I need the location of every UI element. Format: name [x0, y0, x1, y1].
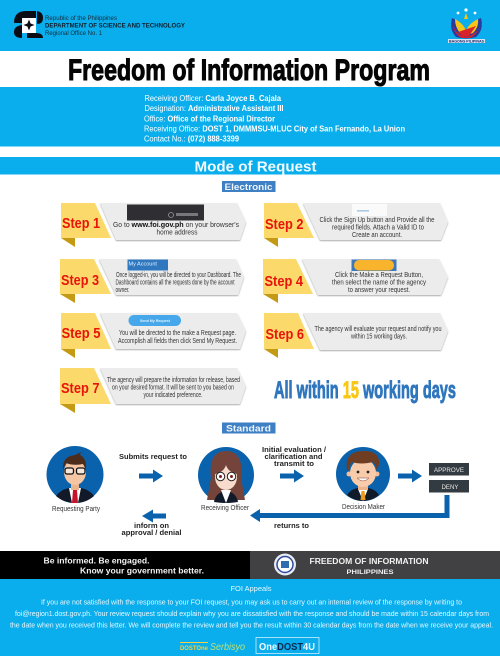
step 5: Accomplish all fields then click Send My Request.	[118, 338, 237, 345]
button: approve	[429, 463, 469, 476]
label: initial evaluation: clarification and	[264, 452, 322, 461]
icon: decision maker	[336, 447, 390, 501]
button: deny: DENY	[442, 484, 459, 491]
banner: slogan: Be informed. Be engaged.	[44, 556, 150, 566]
button: deny	[429, 480, 469, 492]
step 5: Step 5	[62, 325, 100, 342]
step 2	[264, 203, 448, 247]
label: returns to: returns to	[274, 521, 310, 530]
step 4	[263, 259, 448, 303]
step 5	[61, 313, 246, 358]
step 1: Go to www.foi.gov.ph on your browser's	[113, 220, 239, 229]
step 1	[61, 203, 246, 247]
step 7: Step 7	[61, 380, 100, 397]
step 2: Step 2	[265, 216, 304, 233]
step 5: Send My Request	[140, 319, 171, 323]
department name: DEPARTMENT OF SCIENCE AND TECHNOLOGY	[45, 23, 185, 29]
label: initial evaluation	[262, 445, 326, 468]
panel: FOI appeals: If you are not satisfied with the response to your FOI request, you may ask us to carry out an internal review of the response by writing to	[41, 598, 462, 606]
arrow: to decision maker	[280, 470, 304, 482]
step 2: Click the Sign Up button and Provide all the	[320, 217, 435, 224]
step 4: to answer your request.	[348, 287, 410, 294]
icon: requesting party	[46, 446, 104, 503]
logo: OneDOST4U: OneDOST4U	[259, 642, 315, 653]
heading: Standard	[222, 422, 276, 434]
heading: Mode of Request	[0, 157, 500, 175]
step 7: The agency will prepare the information for release, based	[107, 377, 240, 384]
caption: receiving officer: Receiving Officer	[201, 505, 250, 512]
arrow: to receiving officer	[139, 470, 163, 482]
panel: receiving officer details: Receiving Officer: Carla Joyce B. Cajala	[144, 94, 282, 103]
step 6: The agency will evaluate your request and notify you	[314, 326, 442, 333]
panel: receiving officer details: Office: Office of the Regional Director	[144, 114, 275, 124]
label: initial evaluation: transmit to	[274, 459, 315, 468]
label: inform on approval or denial: inform on	[134, 521, 169, 530]
icon: DOST logo	[14, 11, 43, 38]
step 3	[60, 259, 244, 303]
icon: FOI seal	[274, 554, 296, 576]
department name: Regional Office No. 1	[45, 31, 103, 37]
icon: Bagong Pilipinas logo: BAGONG PILIPINAS	[449, 39, 484, 43]
step 3: owner.	[116, 287, 130, 294]
header band	[0, 0, 500, 51]
department name: Republic of the Philippines	[45, 16, 117, 22]
step 2: Create an account.	[352, 232, 402, 239]
logo: DOSTOne Serbisyo	[180, 642, 245, 653]
banner: FOI Philippines: FREEDOM OF INFORMATION	[310, 557, 429, 566]
step 3: Once logged-in, you will be directed to your Dashboard. The	[116, 272, 241, 279]
caption: decision maker: Decision Maker	[342, 504, 386, 511]
banner: slogan	[0, 551, 250, 579]
caption: requesting party: Requesting Party	[52, 506, 100, 513]
step 6: within 15 working days.	[350, 334, 407, 340]
step 2: required fields. Attach a Valid ID to	[332, 224, 424, 232]
panel: FOI appeals: foi@region1.dost.gov.ph. Your review request should explain why you are dissatisfied with the response and should be made within 15 calendar days from	[15, 609, 489, 618]
department name	[45, 16, 185, 37]
arrow: inform requesting party	[142, 510, 166, 522]
step 1: home address	[156, 230, 198, 236]
banner: FOI Philippines	[250, 551, 500, 579]
step 1: Step 1	[62, 215, 100, 232]
step 7: on your desired format. It will be sent to you based on	[112, 384, 234, 392]
arrow: to approve or deny	[398, 470, 422, 482]
panel: receiving officer details: Contact No.: (072) 888-3399	[144, 134, 240, 144]
step 7: your indicated preference.	[144, 392, 203, 399]
logo: OneDOST4U	[256, 638, 319, 654]
arrow: returns to receiving officer	[250, 495, 450, 522]
panel: FOI appeals: the date when you received this letter. We will complete the review and tell you the result within 30 calendar days from the date when we receive your appeal.	[10, 620, 493, 630]
step 4: Step 4	[264, 273, 304, 290]
step 5: You will be directed to the make a Request page.	[119, 330, 236, 337]
logo: DOSTOne Serbisyo: DOSTOne	[180, 646, 209, 652]
step 4: Click the Make a Request Button,	[335, 272, 423, 279]
step 6	[264, 313, 448, 358]
button: approve: APPROVE	[434, 467, 464, 474]
panel: FOI appeals	[0, 579, 500, 656]
label: submits request to: Submits request to	[119, 452, 188, 461]
banner: FOI Philippines: PHILIPPINES	[346, 569, 394, 576]
step 3: My Account	[128, 262, 157, 268]
panel: FOI appeals: FOI Appeals	[230, 584, 272, 593]
step 3: Step 3	[61, 272, 99, 289]
step 7	[60, 368, 246, 413]
step 3: Dashboard contains all the requests done by the account	[116, 280, 235, 286]
logo: DOSTOne Serbisyo: Serbisyo	[210, 642, 245, 653]
icon: Bagong Pilipinas logo	[448, 8, 485, 43]
heading: Standard: Standard	[226, 424, 271, 434]
heading: Electronic: Electronic	[224, 182, 272, 192]
step 4: then select the name of the agency	[332, 280, 426, 286]
banner: slogan: Know your government better.	[80, 566, 204, 576]
step 6: Step 6	[266, 326, 304, 343]
panel: receiving officer details	[0, 87, 500, 146]
panel: receiving officer details: Receiving Office: DOST 1, DMMMSU-MLUC City of San Fernando, La Union	[144, 124, 405, 134]
label: initial evaluation: Initial evaluation /	[262, 445, 326, 454]
panel: receiving officer details: Designation: Administrative Assistant III	[144, 104, 284, 113]
label: inform on approval or denial: approval / denial	[122, 528, 182, 537]
heading: Mode of Request: Mode of Request	[194, 159, 317, 175]
icon: receiving officer	[198, 447, 254, 503]
label: inform on approval or denial	[122, 521, 182, 537]
